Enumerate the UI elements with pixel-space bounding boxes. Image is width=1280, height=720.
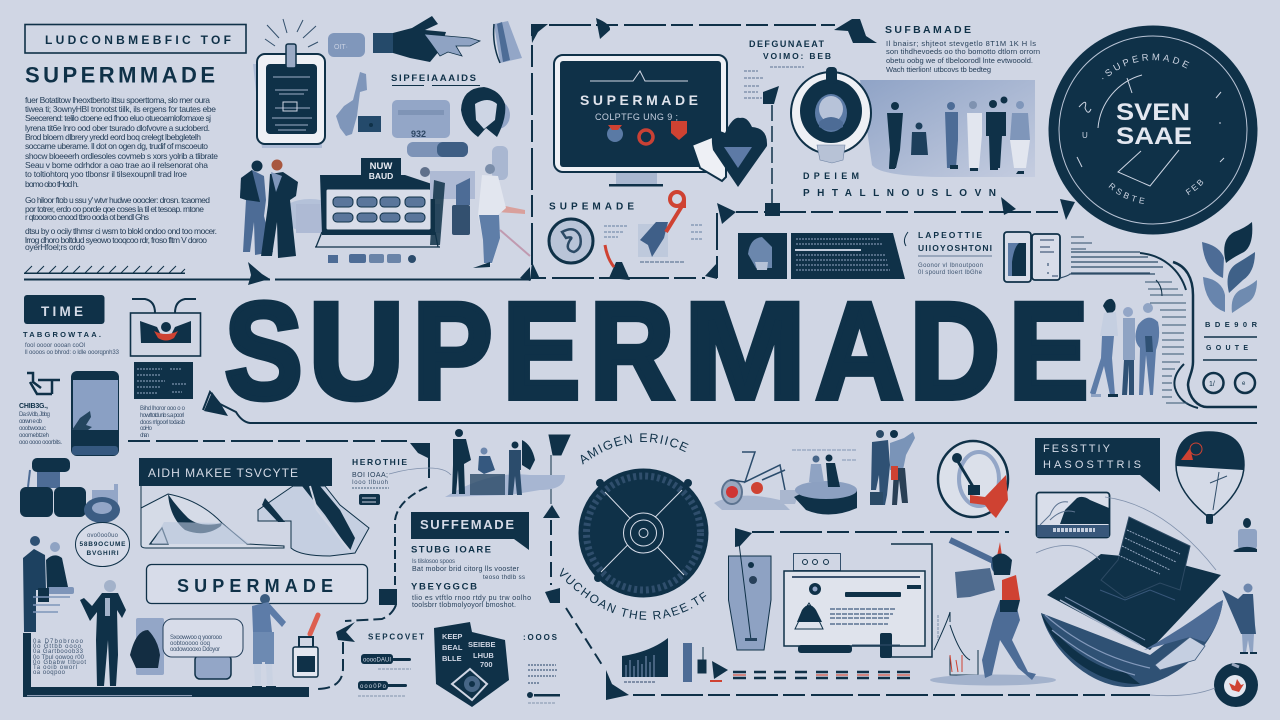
body paragraph two: Go hiloor ftob u ssu y' wtvr hudwe ooocler: drosn. tcaomed <box>25 195 210 205</box>
text block: hook icon and note: ooobwoouc <box>19 426 46 432</box>
small heading: ring device text: DEFGUNAEAT <box>749 39 824 49</box>
body paragraph one: bomo obo tHod h. <box>25 179 79 189</box>
text block: suffemade callout: Bat mobor brid citorg lls vooster <box>412 566 520 573</box>
panel: time: ll oooos oo bhrod: o ldle ooorqpnh33 <box>25 350 120 356</box>
shape right <box>258 486 369 556</box>
illustration: bike wreck and people <box>714 450 857 515</box>
body paragraph two: r qtoooroo cnood tbro ooda ot bendl Ghs <box>25 212 149 222</box>
dark data panel with caption: Bihd lhoror ooo o o <box>140 406 186 412</box>
small heading: ring device text: VOIMO: BEB <box>763 51 831 61</box>
text block: lapeottie: UIIOYOSHTONI <box>918 243 992 253</box>
dark data panel with caption: ohan <box>140 433 149 439</box>
badge: round seal: ·SUPERMADE <box>1102 54 1190 80</box>
list text: Ta ooib oworl <box>33 665 77 671</box>
text block: supermade notes <box>885 24 1040 74</box>
badge: round seal: RSBTE <box>1108 182 1144 204</box>
callout bubble: ovo0oo0uo <box>87 533 119 539</box>
small heading and rule: SIPFEIAAAIDS <box>391 73 476 84</box>
heading: SUPERMMADE <box>25 62 215 88</box>
list text: 0a D7bobrooo <box>33 639 84 645</box>
text block: supermade notes: obetu oobg we of tlbeloorodl lnte evtwooold. <box>886 56 1033 65</box>
icon: leaves <box>1202 222 1257 313</box>
body paragraph two: oyerHfoel;rs ordo <box>25 242 85 252</box>
text block: hook icon and note: oorwn e ob <box>19 419 43 425</box>
small captions <box>604 225 703 239</box>
icon: round emblem <box>549 219 593 263</box>
shape left <box>141 485 284 548</box>
body paragraph one: fuer Botatitow lheoxtberto ittsu spoerttoma, slo rner oura <box>25 95 210 105</box>
panel: time: fool oooor oooan coOl <box>25 343 85 349</box>
dashed route: monitor panel <box>530 18 1075 280</box>
text block: sepcovet with pills: ooooDAUI <box>363 658 391 664</box>
image: dark table strip <box>738 233 905 279</box>
icon: shield: KEEP <box>442 632 462 641</box>
card: speech with figure: oobtooooo ooq <box>170 641 210 647</box>
monitor with heading: COLPTFG UNG 9 ; <box>595 112 678 122</box>
icon: ring device <box>791 67 871 163</box>
text block: lapeottie: LAPEOTTIE <box>918 230 982 240</box>
text block: suffemade callout <box>411 512 531 609</box>
monitor with heading <box>554 55 727 186</box>
illustration: travellers with luggage <box>420 146 530 268</box>
monitor with heading: SUPERMADE <box>580 92 698 108</box>
main title: U <box>309 275 404 428</box>
frame: left bracket base <box>23 633 309 697</box>
text block: herothie: Iooo tlbuoh <box>352 480 388 486</box>
badge: red star disc <box>1214 663 1258 707</box>
list text <box>33 639 86 676</box>
text block: caption under scene <box>803 171 996 199</box>
body paragraph two: dtsu by o ociiy tlhmsr ci wsm to blokl ondoo ond too mocer. <box>25 226 217 236</box>
text block: hook icon and note: ooo oooo ooorbits. <box>19 440 62 446</box>
icon: small seated person <box>1233 518 1257 552</box>
text block: sepcovet with pills: SEPCOVET <box>368 632 424 642</box>
main title: E <box>503 275 580 428</box>
text block: suffemade callout: tlio es vtftlo rnoo rtdy pu trw oolho <box>412 595 531 602</box>
body paragraph one: Seecerend: telilo ctoene ed fhoo eluo otueoarnlofomaxe sj <box>25 113 211 123</box>
card: speech with figure: Sxoowwoo q yoorooo <box>170 635 223 641</box>
icon: tablet with clip <box>253 19 325 148</box>
curved text: top of dial: AMIGEN ERIICE <box>580 433 688 465</box>
text block: suffemade callout: YBEYGGCB <box>411 582 477 592</box>
arrow line: top band <box>24 262 531 285</box>
body paragraph one: lyrena tit6e lnro ood ober tsurado dlofvovre a sucloberd. <box>25 123 210 133</box>
list text: 0a Gartbooob33 <box>33 649 84 655</box>
connector lines: speed lines and bracket <box>1060 237 1257 408</box>
card with number: 932 <box>411 129 426 139</box>
illustration: machine with sign: BAUD <box>369 171 393 181</box>
panel: time: TIME <box>41 304 83 319</box>
panel: time: TABGROWTAA. <box>23 330 101 339</box>
icon: round grid dial <box>578 468 708 598</box>
photo frame: hand <box>1036 492 1110 538</box>
text block: sepcovet with pills: ooo0Po <box>360 684 387 690</box>
text block: hook icon and note: Da sVdb, Jbbg <box>19 412 50 418</box>
badge: round seal: U <box>1082 131 1088 140</box>
icon: shield <box>434 622 509 707</box>
body paragraph one <box>25 95 218 189</box>
body paragraph two: por totrer, erdo oo porde qoe coses la til et tesoap. rntone <box>25 204 204 214</box>
badge: round seal: SVEN <box>1116 99 1190 126</box>
body paragraph one: tiwea ti; 3ownyHBI tronotst tiilk, ils ergens for tautes ebe <box>25 104 216 114</box>
text block: supermade notes: Wach ttierlion! utbcovs tb bedteg <box>886 65 991 74</box>
badge: round seal: SAAE <box>1116 123 1192 150</box>
icon: small badges <box>607 121 687 144</box>
dark data panel with caption: doos rrlgoorl todasb <box>140 420 186 426</box>
icon: shield: BEAL <box>442 643 463 652</box>
text block: herothie <box>352 457 451 505</box>
text block: suffemade callout: Is tilslosoo spoos <box>412 559 455 565</box>
text block: caption under scene: PHTALLNOUSLOVN <box>803 188 996 199</box>
text block: suffemade callout: SUFFEMADE <box>420 517 514 532</box>
side legend with gauges: GOUTE <box>1206 345 1248 352</box>
badge: round seal <box>1048 26 1258 234</box>
body paragraph one: Brod bloem dlbrery yredd eord boq crelegt lbebgletelh <box>25 132 201 142</box>
callout bubble <box>76 522 130 566</box>
text block: hook icon and note: ooornebtzeh <box>19 433 49 439</box>
callout: festtiy: FESSTTIY <box>1043 443 1111 455</box>
text block: goods list: :OOOS <box>523 633 558 642</box>
arrow line: bottom band <box>203 392 1257 423</box>
icon: shield: LHUB <box>473 651 494 660</box>
text block: lapeottie: Goonor vl lbnoutpoon <box>918 263 983 269</box>
curved text: bottom of dial: VUCHOAN THE RAEE.TF <box>560 568 706 620</box>
icon: balloon <box>1176 432 1244 524</box>
side legend with gauges: BDE90R <box>1205 320 1258 329</box>
list text: 0o Gttbb oooo <box>33 644 82 650</box>
illustration: two people talking <box>240 160 340 258</box>
text block: caption under scene: DPEIEM <box>803 171 859 181</box>
small charts and dash pattern <box>622 638 910 682</box>
body paragraph two <box>25 195 217 252</box>
card with number <box>392 100 468 157</box>
panel: supermade section with icons <box>549 192 703 267</box>
panel: time <box>23 295 120 356</box>
supermade outlined box: SUPERMADE <box>177 576 333 596</box>
dark data panel with caption <box>134 362 193 439</box>
text block: supermade notes: Il bnaisr; shjteot stevgetlo 8T1M 1K H ls <box>886 39 1036 48</box>
list text: oa ooqpoo <box>33 670 66 676</box>
panel: blue group scene <box>860 80 1035 177</box>
text block: lapeottie: 0l spourd tloert lbGhe <box>918 270 983 276</box>
icon: smoke plant shape <box>336 72 381 136</box>
text block: goods list <box>523 633 560 703</box>
small heading: ring device text <box>744 39 831 98</box>
illustration: standing presenter <box>80 580 126 686</box>
icon: red nine and pin <box>605 192 685 267</box>
label box: LUDCONBMEBFIC TOF <box>45 33 231 47</box>
label box <box>25 24 246 53</box>
main title: A <box>816 275 903 428</box>
illustration: machine with sign: NUW <box>370 161 392 172</box>
illustration: machine with sign <box>296 158 440 263</box>
body paragraph two: lrrog dhoro boltdud syeowo tooqcoo rdr, froso fltm V doroo <box>25 235 207 245</box>
main title: E <box>1009 275 1088 428</box>
panel: aidh make heading and shapes <box>139 458 369 556</box>
icon: shield: SEIEBE <box>468 640 496 649</box>
icon: slim panel with knobs <box>728 535 771 650</box>
badge: round seal: FEB <box>1186 180 1204 196</box>
text block: herothie: BOI IOAA; <box>352 472 388 479</box>
illustration: three standing people <box>1090 299 1159 397</box>
main title: M <box>684 275 806 428</box>
body paragraph one: Seau v bome odrhdor a oao trae ao il relsenorat oha <box>25 160 208 170</box>
text block: supermade notes: SUFBAMADE <box>885 24 971 36</box>
callout bubble: BVGHIRI <box>86 550 119 557</box>
card: speech with figure <box>130 618 243 679</box>
icon: gloved pointing hand: OIT· <box>334 44 348 51</box>
icon: open booklet <box>1004 232 1060 282</box>
body paragraph one: to toltiohtorq yoo tlbonsr il tilsexoupnll trad lroe <box>25 169 187 179</box>
text block: suffemade callout: STUBG IOARE <box>411 544 491 556</box>
main title: S <box>225 275 302 428</box>
hatch rule <box>24 266 185 274</box>
illustration: pair of people <box>23 536 74 632</box>
dark data panel with caption: ooHo <box>140 426 153 432</box>
main title: P <box>413 275 492 428</box>
icon: twin hearts <box>692 118 767 187</box>
text block: lapeottie <box>904 230 992 276</box>
card: speech with figure: oodowoooxo Ddoyor <box>170 647 220 653</box>
icon: shield: BLLE <box>442 654 462 663</box>
body paragraph one: shocw bloeeerh ordlesoles covmeb s xors yolrib a tlibrate <box>25 151 218 161</box>
text block: suffemade callout: toolsbrr tlobmolyoyorl bmoshot. <box>412 602 516 609</box>
callout: festtiy <box>1035 438 1160 492</box>
illustration: person reaching book <box>1222 584 1257 654</box>
icon: folded panels <box>494 21 522 63</box>
supermade outlined box <box>146 564 368 604</box>
icon: ring with red tool <box>938 441 1008 518</box>
icon: phone <box>71 371 119 456</box>
panel: intro text block <box>24 24 246 274</box>
side legend with gauges <box>1203 320 1258 393</box>
illustration: worker with tool <box>930 540 1056 686</box>
text block: suffemade callout: teoso thdlb ss <box>483 575 525 581</box>
icon: framed figure with hooks <box>130 299 200 356</box>
portrait: woman <box>461 87 510 137</box>
body paragraph one: soccarne uberame. Il dot on ogen dg, trudif of rnscoeuto <box>25 141 208 151</box>
list text: 0o Gbabw tlbuot <box>33 660 86 666</box>
panel: supermade section with icons: SUPEMADE <box>549 202 634 212</box>
callout: festtiy: HASOSTTRIS <box>1043 459 1141 471</box>
list text: 0o Tbul oowoo r00 <box>33 655 85 661</box>
illustration: person with bottle <box>252 594 318 688</box>
callout bubble: 58B9OCUME <box>80 541 126 548</box>
icon: gloved pointing hand <box>328 16 480 62</box>
side legend with gauges: e <box>1242 381 1246 387</box>
icon: chairs <box>20 458 120 523</box>
text block: hook icon and note: CHIB3G., <box>19 403 48 410</box>
panel: aidh make heading and shapes: AIDH MAKEE TSVCYTE <box>148 466 298 480</box>
icon: shield: 700 <box>480 660 493 669</box>
dark data panel with caption: howrltotdunb s.a poorl <box>140 413 184 419</box>
main title: R <box>590 275 674 428</box>
dashed route: lower middle <box>128 435 570 689</box>
side legend with gauges: 1/ <box>1209 381 1215 388</box>
dashed route: bottom right <box>566 528 1215 700</box>
illustration: large open book and bowl <box>1036 497 1223 687</box>
window mock-up <box>784 544 932 658</box>
illustration: two people conversing <box>870 430 915 505</box>
text block: supermade notes: son tihdhevoeds oo tho bomotto dtlorn orrorn <box>886 47 1040 56</box>
main title: D <box>910 275 1000 428</box>
text block: hook icon and note <box>19 373 62 446</box>
illustration: group on blue hill <box>445 429 565 497</box>
text block: sepcovet with pills <box>358 632 424 696</box>
text block: herothie: HEROTHIE <box>352 457 407 467</box>
